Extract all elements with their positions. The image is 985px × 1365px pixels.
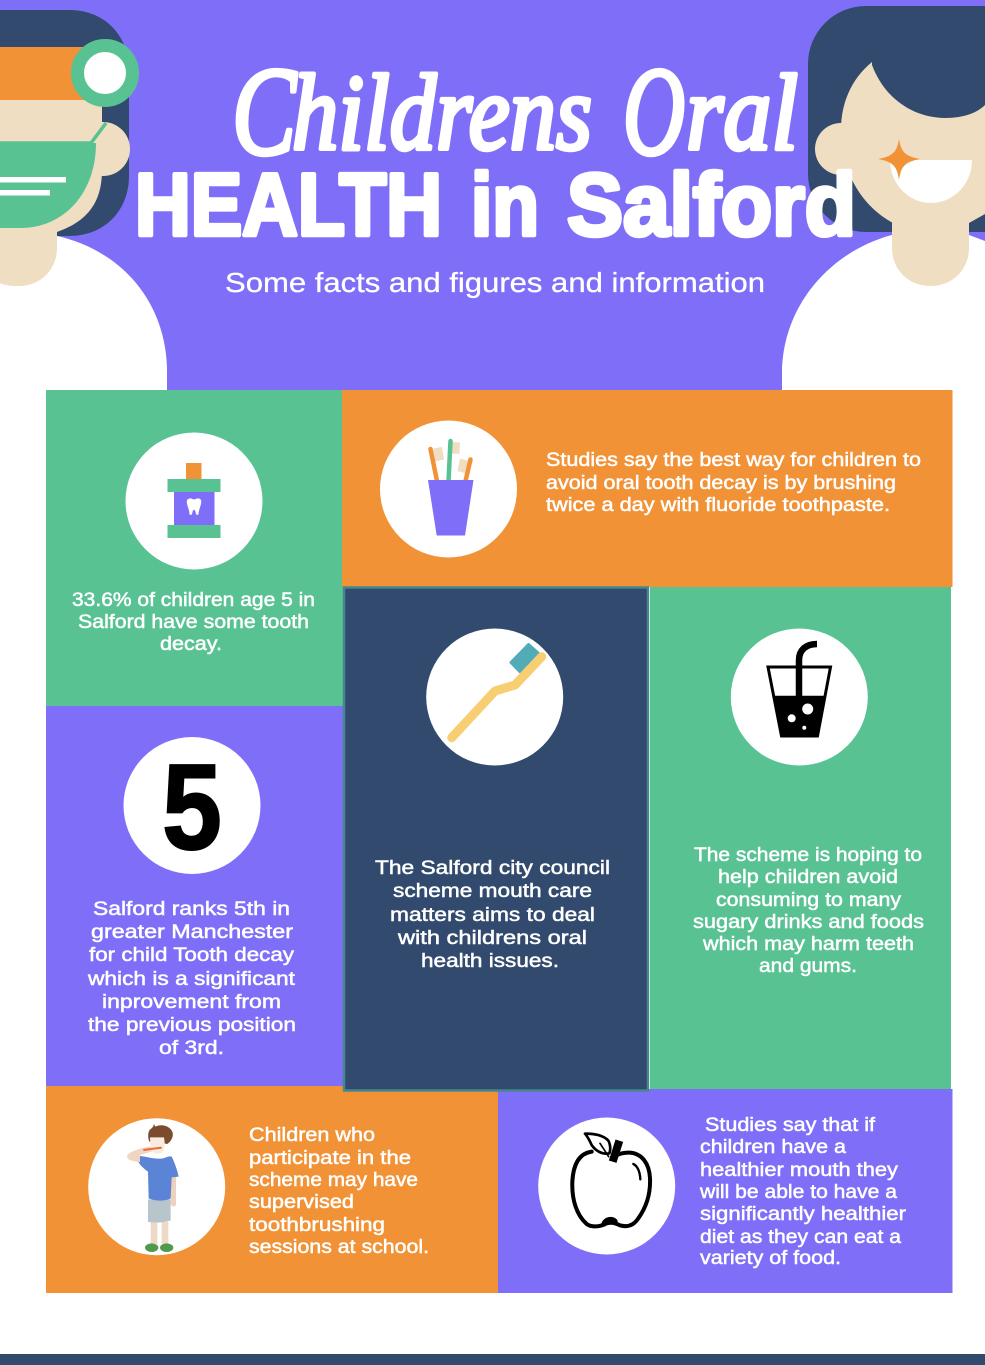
text: council scheme: health issues. [421, 950, 559, 972]
text: avoid sugary drinks: sugary drinks and foods [693, 911, 924, 933]
title: O [623, 43, 685, 182]
text: supervised sessions [249, 1124, 429, 1258]
icon: number 5 [124, 737, 260, 876]
text: avoid sugary drinks: help children avoid [718, 866, 898, 888]
text: ranking: for child Tooth decay [89, 944, 294, 966]
text: 33.6% of children: 33.6% of children age 5 in [72, 589, 315, 611]
text: healthier mouth: Studies say that if [705, 1114, 876, 1136]
text: brushing twice a day [546, 449, 921, 516]
text: council scheme: The Salford city council [375, 857, 610, 879]
text: brushing twice a day: twice a day with fluoride toothpaste. [546, 494, 890, 516]
title: HEALTH [135, 155, 442, 254]
text: ranking: Salford ranks 5th in [93, 898, 290, 920]
icon: number 5: 5 [162, 740, 222, 876]
illustration: dentist with mask [0, 10, 167, 390]
text: avoid sugary drinks: consuming to many [716, 889, 901, 911]
text: avoid sugary drinks: which may harm teeth [702, 933, 914, 955]
footer bar [0, 1354, 985, 1365]
text: ranking [87, 898, 296, 1059]
text: healthier mouth: significantly healthier [700, 1203, 907, 1225]
text: healthier mouth: healthier mouth they [700, 1159, 898, 1181]
text: supervised sessions: scheme may have [249, 1169, 418, 1191]
text: healthier mouth: will be able to have a [699, 1181, 897, 1203]
title: ral [686, 54, 798, 173]
panel: healthier diet [498, 1089, 952, 1293]
header background [0, 0, 985, 390]
subtitle: Some facts and figures and information [225, 267, 765, 298]
text: healthier mouth [699, 1114, 907, 1269]
text: ranking: which is a significant [87, 968, 296, 990]
text: brushing twice a day: Studies say the best way for children to [546, 449, 921, 471]
panel: sugary drinks [650, 587, 951, 1089]
text: supervised sessions: sessions at school. [249, 1236, 429, 1258]
title: C [232, 43, 297, 182]
text: council scheme: scheme mouth care [393, 880, 592, 902]
text: avoid sugary drinks: The scheme is hoping to [694, 844, 922, 866]
icon: toothbrushes in cup [380, 420, 517, 558]
text: 33.6% of children: decay. [160, 633, 222, 655]
text: supervised sessions: Children who [249, 1124, 375, 1146]
text: supervised sessions: supervised [249, 1191, 354, 1213]
icon: apple [538, 1118, 675, 1254]
text: healthier mouth: children have a [700, 1136, 846, 1158]
title: Salford [567, 155, 856, 254]
text: 33.6% of children: Salford have some tooth [78, 611, 309, 633]
text: council scheme: with childrens oral [397, 927, 587, 949]
illustration: smiling patient [782, 6, 985, 390]
text: ranking: greater Manchester [91, 921, 294, 943]
text: avoid sugary drinks: and gums. [759, 955, 857, 977]
text: healthier mouth: variety of food. [700, 1247, 841, 1269]
icon: fizzy drink [731, 628, 868, 766]
text: supervised sessions: participate in the [249, 1147, 411, 1169]
icon: toothbrush [426, 628, 563, 766]
icon: mouthwash bottle [126, 432, 262, 570]
panel: tooth decay statistic [46, 390, 343, 706]
panel: Salford ranks 5th [46, 706, 344, 1086]
text: avoid sugary drinks [693, 844, 924, 977]
title: hildrens [292, 54, 592, 173]
text: council scheme: matters aims to deal [390, 904, 595, 926]
text: council scheme [375, 857, 610, 972]
text: supervised sessions: toothbrushing [249, 1214, 385, 1236]
text: ranking: of 3rd. [159, 1037, 224, 1059]
text: brushing twice a day: avoid oral tooth decay is by brushing [546, 472, 896, 494]
text: ranking: the previous position [88, 1014, 296, 1036]
icon: boy brushing teeth [88, 1118, 225, 1255]
text: 33.6% of children [72, 589, 315, 655]
panel: brushing advice [342, 390, 952, 587]
text: ranking: inprovement from [102, 991, 281, 1013]
text: healthier mouth: diet as they can eat a [700, 1226, 901, 1248]
panel: mouth care matters scheme [344, 588, 648, 1090]
panel: supervised brushing [46, 1086, 498, 1293]
title [135, 43, 856, 254]
title: in [471, 155, 539, 254]
